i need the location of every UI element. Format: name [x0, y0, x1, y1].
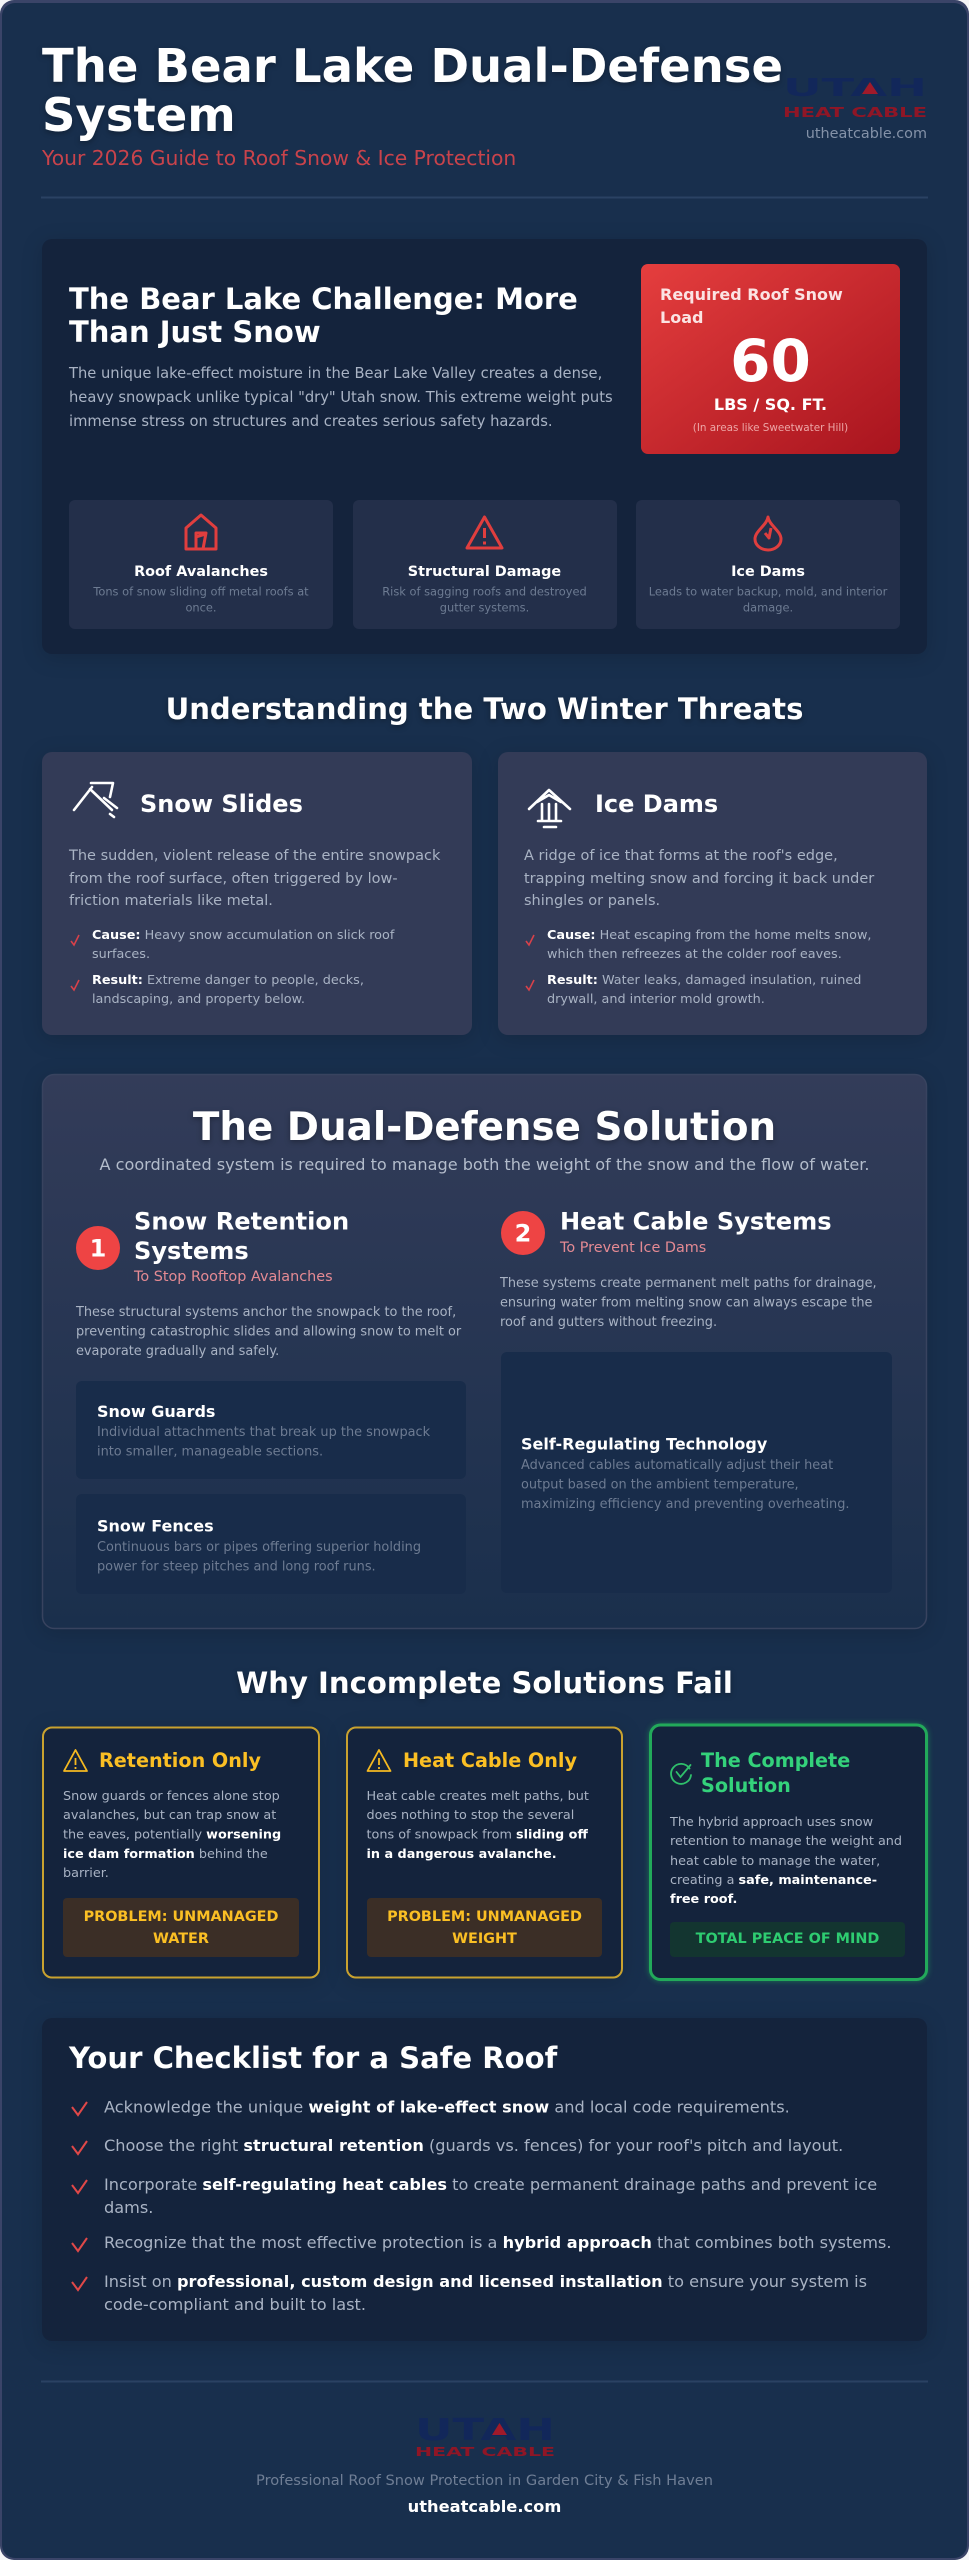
card: snow guards: into smaller, manageable sections.	[97, 1444, 323, 1460]
body: Heat cable creates melt paths, but	[366, 1789, 589, 1804]
card: snow guards: Snow Guards	[97, 1402, 215, 1421]
heat cable text	[499, 1276, 877, 1330]
item 3	[72, 2175, 877, 2217]
heat cable text: These systems create permanent melt paths for drainage,	[499, 1276, 877, 1291]
card: roof avalanches: once.	[185, 600, 217, 614]
description: The sudden, violent release of the entire snowpack	[68, 848, 441, 864]
icon: ice dam roof	[529, 790, 570, 827]
body: free roof.	[670, 1892, 737, 1907]
card: the complete solution	[650, 1725, 926, 1980]
body: heat cable to manage the water,	[670, 1854, 880, 1869]
cause item: surfaces.	[92, 947, 150, 962]
card: the complete solution: The Complete	[701, 1749, 850, 1772]
problem tag: WATER	[153, 1931, 209, 1947]
body: ice dam formation behind the	[63, 1847, 268, 1862]
item 4: Recognize that the most effective protection is a hybrid approach that combines both systems.	[104, 2233, 891, 2252]
icon: house	[186, 515, 216, 549]
card: heat cable only	[347, 1728, 622, 1978]
card: ice dams	[636, 500, 900, 629]
column: snow retention: To Stop Rooftop Avalanches	[133, 1269, 333, 1285]
header logo	[783, 73, 927, 121]
result item: drywall, and interior mold growth.	[547, 992, 765, 1007]
result item: Result: Water leaks, damaged insulation, ruined	[547, 973, 861, 988]
description: A ridge of ice that forms at the roof's edge,	[524, 848, 838, 864]
card: retention only: Retention Only	[99, 1749, 261, 1772]
header	[41, 39, 927, 170]
item 5	[72, 2272, 867, 2314]
card: structural damage: Structural Damage	[408, 564, 561, 580]
item 5: code-compliant and built to last.	[104, 2295, 366, 2314]
column: snow retention: Snow Retention	[134, 1208, 349, 1236]
card: self-regulating technology: maximizing efficiency and preventing overheating.	[521, 1497, 849, 1512]
body: does nothing to stop the several	[366, 1808, 574, 1823]
panel: snow slides: Snow Slides	[140, 790, 303, 818]
card: self-regulating technology: Advanced cables automatically adjust their heat	[521, 1458, 833, 1473]
challenge text	[68, 365, 613, 430]
card: self-regulating technology	[501, 1352, 892, 1593]
column: snow retention	[75, 1208, 466, 1594]
callout: required roof snow load: (In areas like Sweetwater Hill)	[693, 422, 848, 434]
panel: snow slides	[42, 752, 472, 1035]
card: roof avalanches	[69, 500, 333, 629]
badge 2: 2	[515, 1220, 531, 1248]
challenge heading: The Bear Lake Challenge: More	[69, 282, 578, 316]
card: ice dams: Ice Dams	[731, 564, 805, 580]
title: The Bear Lake Dual-Defense	[42, 39, 783, 93]
description: friction materials like metal.	[69, 893, 273, 909]
card: self-regulating technology: output based on the ambient temperature,	[521, 1478, 799, 1492]
card: roof avalanches: Roof Avalanches	[134, 564, 268, 580]
challenge text: The unique lake-effect moisture in the Bear Lake Valley creates a dense,	[68, 365, 602, 382]
cause item: Cause: Heavy snow accumulation on slick roof	[92, 928, 395, 943]
body: the eaves, potentially worsening	[63, 1828, 281, 1842]
footer url: utheatcable.com	[408, 2497, 561, 2516]
header logo: UTAH	[783, 73, 927, 102]
callout: required roof snow load: LBS / SQ. FT.	[714, 395, 827, 414]
callout: required roof snow load	[641, 264, 900, 454]
result item	[526, 973, 861, 1007]
icon: warning	[64, 1750, 87, 1771]
item 3: dams.	[104, 2198, 153, 2217]
column: heat cable: To Prevent Ice Dams	[559, 1240, 706, 1256]
icon: check circle	[671, 1764, 691, 1784]
card: snow fences: power for steep pitches and long roof runs.	[97, 1560, 376, 1574]
card: structural damage: gutter systems.	[440, 600, 529, 614]
solution subheading: A coordinated system is required to manage both the weight of the snow and the flow of water.	[100, 1155, 869, 1174]
panel: ice dams: Ice Dams	[595, 790, 718, 818]
item 2: Choose the right structural retention (guards vs. fences) for your roof's pitch and layout.	[104, 2136, 843, 2155]
footer logo: UTAH	[415, 2413, 555, 2448]
header logo: HEAT CABLE	[783, 105, 927, 121]
body: Snow guards or fences alone stop	[63, 1789, 280, 1804]
outcome tag: TOTAL PEACE OF MIND	[696, 1931, 879, 1947]
icon: warning	[368, 1750, 390, 1771]
heading: why incomplete solutions fail: Why Incomplete Solutions Fail	[236, 1666, 733, 1700]
description: trapping melting snow and forcing it back under	[524, 871, 874, 887]
body	[63, 1789, 281, 1881]
badge 1	[76, 1226, 120, 1270]
card: roof avalanches: Tons of snow sliding off metal roofs at	[92, 584, 309, 598]
column: heat cable	[499, 1208, 892, 1593]
card: snow guards: Individual attachments that break up the snowpack	[97, 1425, 431, 1440]
card: retention only	[43, 1728, 319, 1978]
cause item: Cause: Heat escaping from the home melts snow,	[547, 928, 872, 943]
card: snow fences	[76, 1494, 466, 1594]
item 5: Insist on professional, custom design and licensed installation to ensure your system is	[104, 2272, 867, 2291]
badge 2	[501, 1211, 545, 1255]
item 3: Incorporate self-regulating heat cables to create permanent drainage paths and prevent ice	[104, 2175, 877, 2194]
card: the complete solution: Solution	[701, 1774, 791, 1797]
checklist heading: Your Checklist for a Safe Roof	[68, 2041, 558, 2075]
outcome tag	[670, 1922, 905, 1957]
card: ice dams: Leads to water backup, mold, and interior	[649, 584, 888, 598]
callout: required roof snow load: Required Roof Snow	[660, 285, 843, 304]
card: snow guards	[76, 1381, 466, 1479]
retention text: preventing catastrophic slides and allowing snow to melt or	[76, 1324, 462, 1340]
problem tag: WEIGHT	[452, 1931, 517, 1947]
retention text: evaporate gradually and safely.	[76, 1344, 279, 1359]
panel: ice dams	[498, 752, 927, 1035]
column: snow retention: Systems	[134, 1237, 249, 1265]
body: tons of snowpack from sliding off	[366, 1828, 588, 1842]
cause item	[71, 928, 395, 962]
problem tag	[63, 1898, 299, 1957]
body: barrier.	[63, 1866, 109, 1881]
problem tag	[367, 1898, 602, 1957]
retention text	[75, 1305, 462, 1359]
callout: required roof snow load: 60	[730, 327, 811, 395]
challenge text: immense stress on structures and creates serious safety hazards.	[69, 413, 553, 430]
title	[42, 39, 783, 142]
card: ice dams: damage.	[743, 600, 793, 614]
body: in a dangerous avalanche.	[366, 1847, 557, 1862]
body: The hybrid approach uses snow	[669, 1815, 873, 1830]
result item	[71, 973, 364, 1007]
card: structural damage	[353, 500, 617, 629]
challenge text: heavy snowpack unlike typical "dry" Utah snow. This extreme weight puts	[69, 389, 613, 406]
body: retention to manage the weight and	[670, 1834, 902, 1849]
icon: warning triangle	[467, 517, 502, 548]
panel: dual-defense solution	[42, 1074, 926, 1628]
description	[524, 848, 874, 909]
footer logo: HEAT CABLE	[415, 2444, 555, 2459]
heat cable text: ensuring water from melting snow can always escape the	[500, 1296, 872, 1310]
card: heat cable only: Heat Cable Only	[403, 1749, 577, 1772]
result item: Result: Extreme danger to people, decks,	[92, 973, 364, 988]
card: snow fences: Continuous bars or pipes offering superior holding	[97, 1540, 421, 1555]
panel: checklist	[42, 2018, 927, 2341]
icon: water drop	[755, 517, 781, 550]
problem tag: PROBLEM: UNMANAGED	[84, 1909, 278, 1925]
challenge heading	[69, 282, 578, 349]
footer logo	[415, 2413, 555, 2459]
heat cable text: roof and gutters without freezing.	[500, 1315, 717, 1330]
item 1: Acknowledge the unique weight of lake-effect snow and local code requirements.	[104, 2098, 790, 2116]
badge 1: 1	[90, 1234, 106, 1262]
description	[68, 848, 441, 909]
description: from the roof surface, often triggered by low-	[69, 871, 398, 887]
title: System	[42, 88, 236, 142]
heading: two winter threats: Understanding the Two Winter Threats	[166, 692, 803, 726]
panel: the Bear Lake challenge	[42, 239, 927, 654]
body	[669, 1815, 902, 1907]
challenge heading: Than Just Snow	[69, 315, 321, 349]
body: creating a safe, maintenance-	[670, 1873, 877, 1888]
solution heading: The Dual-Defense Solution	[193, 1105, 776, 1150]
header url: utheatcable.com	[806, 126, 927, 142]
card: self-regulating technology: Self-Regulating Technology	[521, 1434, 768, 1454]
icon: snow slide	[74, 783, 117, 817]
description: shingles or panels.	[524, 893, 660, 909]
result item: landscaping, and property below.	[92, 992, 305, 1007]
footer	[256, 2413, 713, 2516]
body: avalanches, but can trap snow at	[63, 1808, 276, 1823]
cause item: which then refreezes at the colder roof eaves.	[547, 947, 842, 962]
card: structural damage: Risk of sagging roofs and destroyed	[382, 584, 587, 598]
subtitle: Your 2026 Guide to Roof Snow & Ice Protection	[41, 146, 516, 170]
card: snow fences: Snow Fences	[97, 1516, 214, 1536]
column: heat cable: Heat Cable Systems	[560, 1208, 832, 1236]
footer tagline: Professional Roof Snow Protection in Garden City & Fish Haven	[256, 2472, 713, 2489]
retention text: These structural systems anchor the snowpack to the roof,	[75, 1305, 456, 1320]
problem tag: PROBLEM: UNMANAGED	[387, 1909, 582, 1925]
body	[366, 1789, 589, 1862]
callout: required roof snow load: Load	[660, 308, 703, 327]
cause item	[526, 928, 872, 962]
